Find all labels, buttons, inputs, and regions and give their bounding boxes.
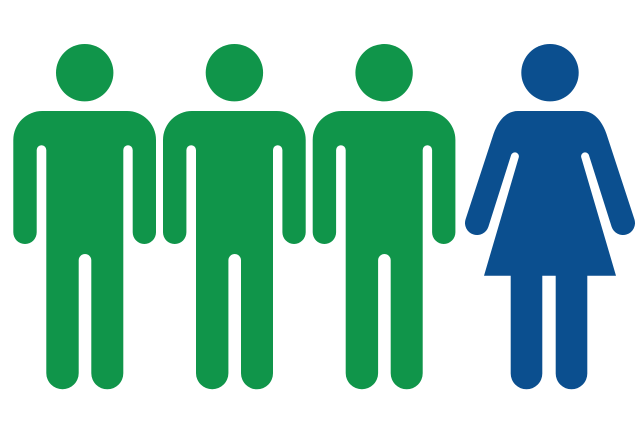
icon: green man 3: [313, 44, 455, 389]
icon: green man 1: [13, 44, 156, 389]
icon: green man 2: [163, 44, 306, 389]
icon: blue woman: [465, 44, 635, 389]
